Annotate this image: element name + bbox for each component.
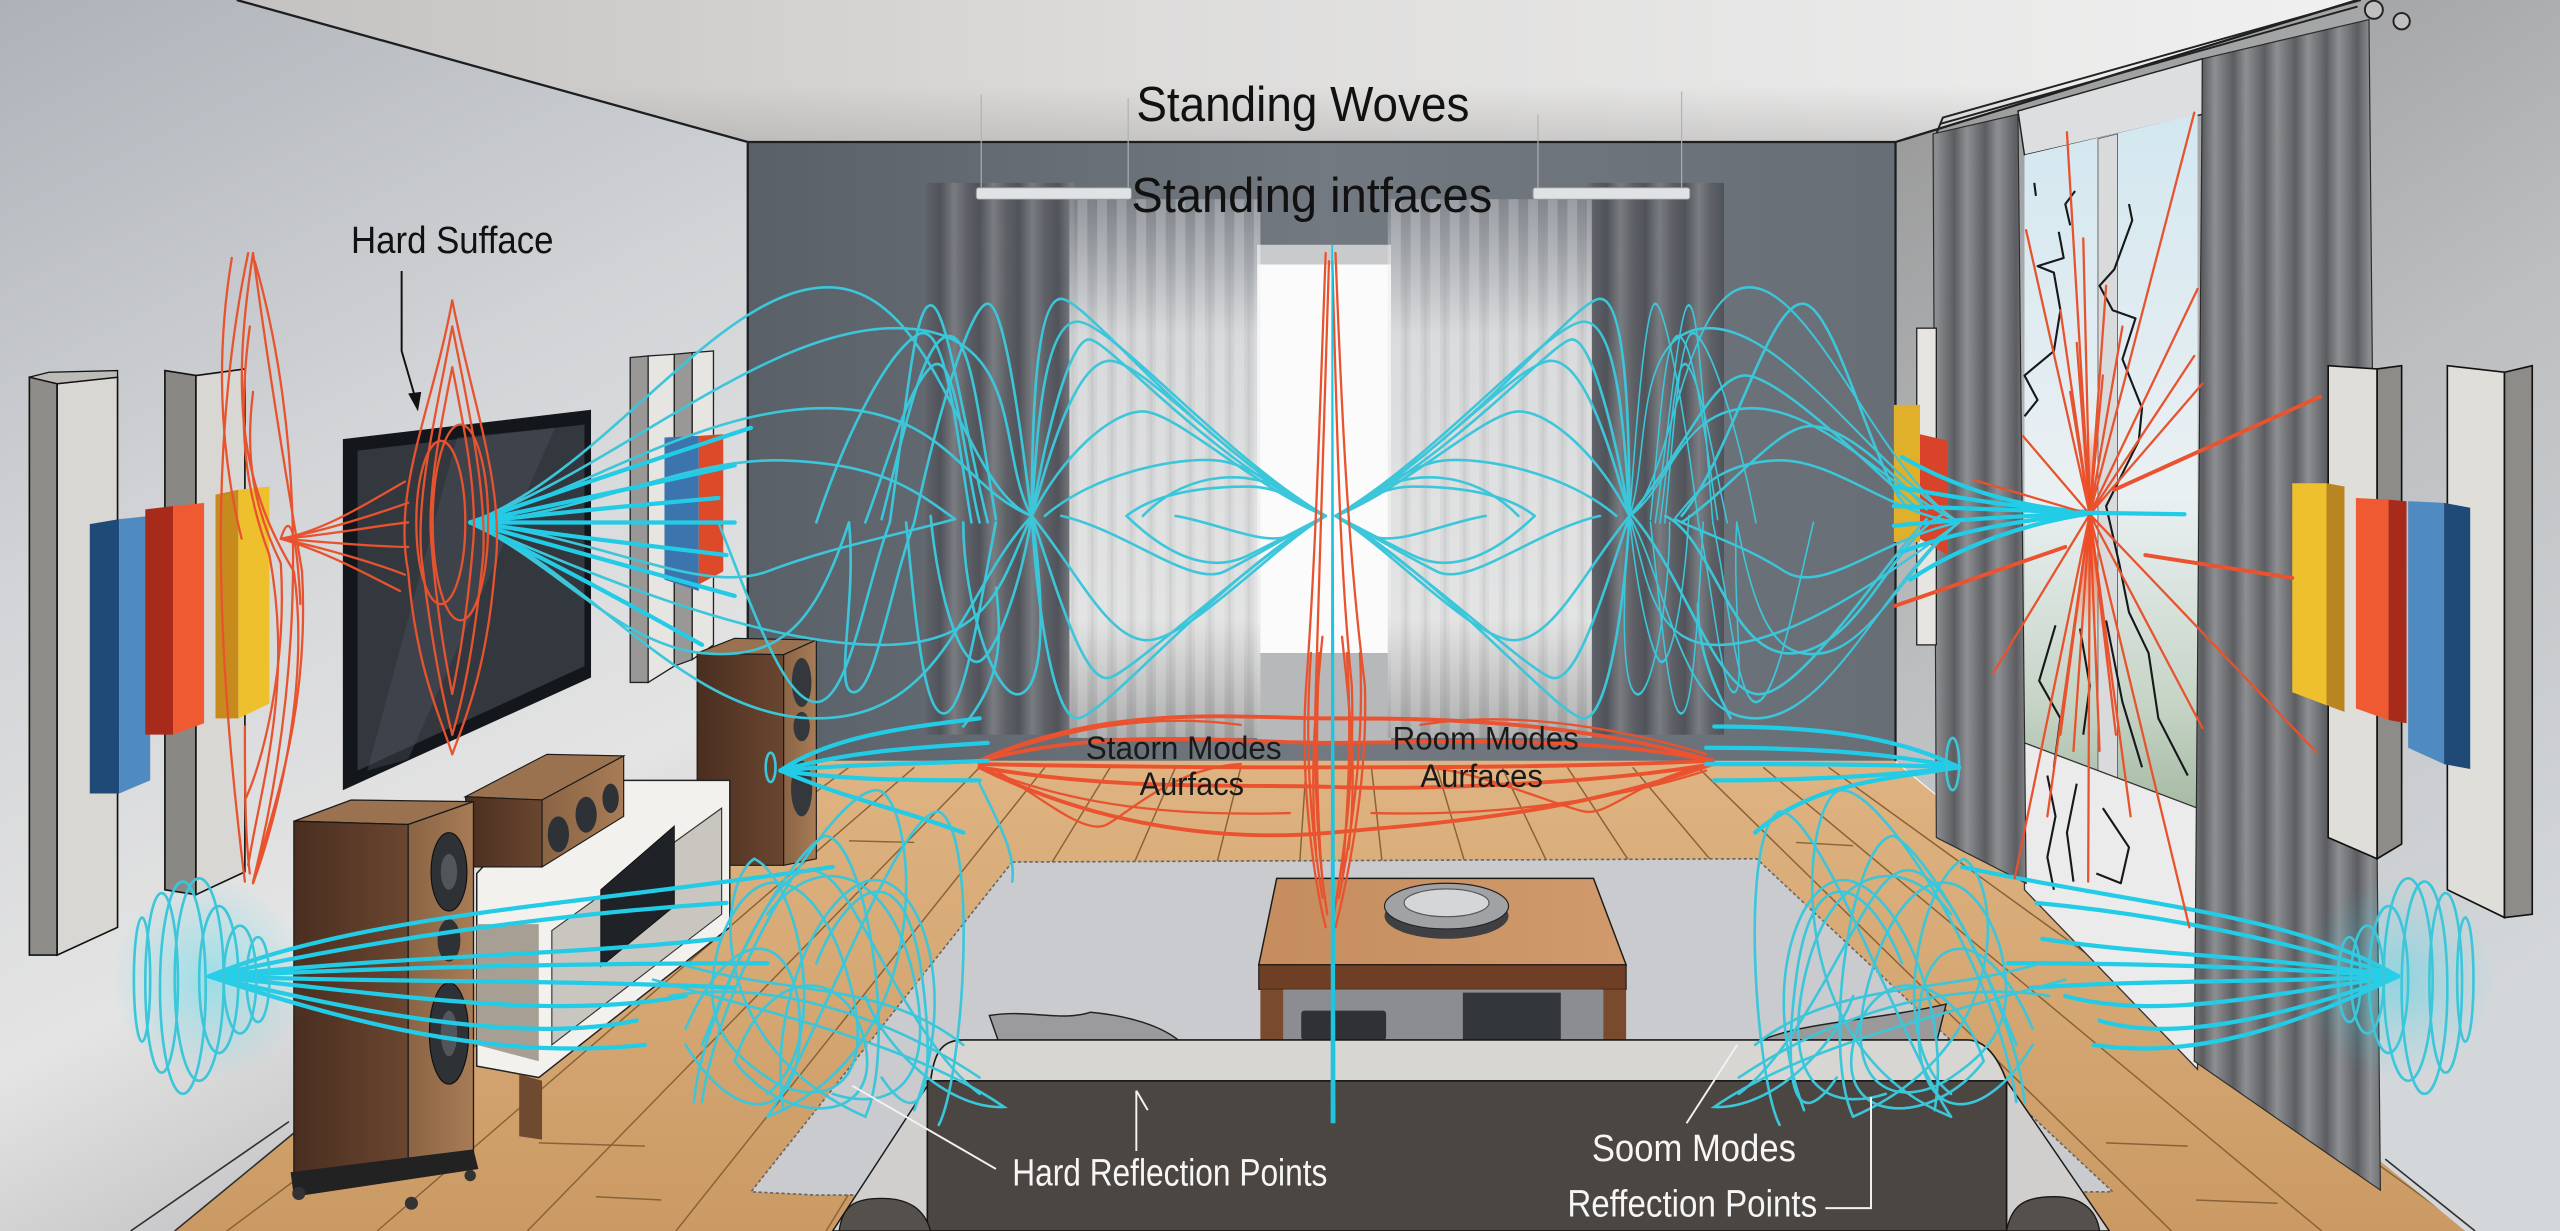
sofa top cushion — [931, 1040, 2007, 1081]
cyan fan upper right — [1894, 457, 2096, 580]
rug — [751, 859, 2113, 1195]
window — [1257, 245, 1391, 653]
back right speaker — [697, 638, 816, 865]
upper cyan bowtie left — [1032, 299, 1326, 718]
left wall red wave — [221, 253, 303, 883]
label: room modes reflection points: Reffection Points — [1567, 1182, 1817, 1225]
cyan mid fan left — [766, 588, 1013, 882]
right window with cracked glass — [2018, 59, 2202, 1069]
left wall — [0, 0, 748, 1231]
small right panels — [1894, 328, 1948, 645]
sofa left arm — [833, 1081, 931, 1231]
small color panels — [664, 434, 723, 591]
label: room modes reflection points: Soom Modes — [1592, 1127, 1796, 1170]
right wall — [1896, 0, 2560, 1231]
media console — [477, 780, 730, 1140]
sofa — [833, 1004, 2109, 1231]
label: hard surface: Hard Sufface — [351, 219, 553, 262]
mullion — [2098, 134, 2118, 784]
window frame above glass — [2018, 59, 2202, 155]
blue panel — [90, 516, 150, 793]
yellow panel — [216, 487, 269, 718]
left sheer curtain — [1069, 199, 1260, 738]
left wall acoustic panels — [29, 351, 723, 955]
label: room modes right: Room Modes — [1393, 719, 1579, 756]
back wall — [748, 142, 1896, 767]
lower right cyan fan — [1962, 867, 2398, 1049]
console left interior — [477, 924, 539, 1061]
right wall acoustic panels — [1894, 328, 2532, 918]
cyan fan upper left — [470, 428, 751, 645]
white panel A — [29, 371, 118, 955]
white panel B — [165, 369, 245, 895]
red panel — [145, 503, 204, 735]
label: room modes left — [1086, 729, 1282, 802]
small white panels — [630, 351, 713, 682]
lower left cyan fan — [209, 867, 833, 1049]
left pressure rings — [111, 878, 307, 1094]
coffee table — [1259, 878, 1626, 1040]
hard surface pointer arrow — [402, 271, 421, 411]
cyan right tip line — [2073, 513, 2184, 514]
right dark curtain — [1587, 183, 1724, 735]
side curtains — [1933, 0, 2410, 1190]
upper cyan bowtie right — [1336, 299, 1629, 718]
av receiver — [601, 826, 674, 967]
central vertical cyan line — [1331, 245, 1336, 1123]
sofa body — [927, 1081, 2007, 1231]
extra right cyan lobes — [1629, 304, 1943, 694]
television red wave — [404, 300, 497, 754]
plate stack — [1384, 883, 1509, 939]
left dark curtain — [924, 183, 1074, 735]
ceiling — [237, 0, 2358, 142]
label: room modes reflection points — [1567, 1127, 1817, 1225]
red room mode lens — [980, 716, 1713, 835]
red panel — [2356, 498, 2407, 723]
right pillow — [1755, 1004, 1946, 1043]
upper cyan lobes right — [1624, 287, 1959, 718]
label: hard reflection points: Hard Reflection Points — [1012, 1151, 1327, 1193]
right ceiling light — [1533, 91, 1690, 199]
white panel R1 — [2328, 366, 2402, 859]
cyan mid fan right — [1698, 604, 1959, 833]
sofa arm cushions — [839, 1198, 931, 1231]
label: room modes right: Aurfaces — [1420, 757, 1543, 794]
upper cyan lobes left — [470, 287, 1041, 718]
red fan — [281, 482, 408, 591]
sofa callout lines — [852, 1045, 1871, 1208]
left ceiling light — [976, 95, 1131, 199]
console shelf interior — [552, 808, 722, 1045]
lower left wave tangle — [653, 790, 1004, 1125]
sill and wall under window — [2024, 743, 2198, 1069]
blue panel — [2408, 501, 2470, 769]
left pillow — [989, 1012, 1182, 1043]
cracks — [2024, 183, 2188, 890]
items under table — [1301, 1011, 1386, 1040]
label: room modes right — [1393, 719, 1579, 794]
front left speaker — [291, 800, 478, 1210]
back window and curtains — [924, 91, 1724, 743]
label: room modes left: Staorn Modes — [1086, 729, 1282, 766]
right curtain inner — [1933, 114, 2026, 883]
wood floor — [78, 761, 2475, 1231]
right pressure rings — [2300, 878, 2496, 1094]
curtain rod — [1936, 0, 2410, 134]
lower right wave tangle — [1714, 790, 2065, 1125]
white panel R2 — [2447, 366, 2532, 918]
central vertical red spindle — [1305, 253, 1365, 927]
yellow panel — [2292, 483, 2344, 712]
sofa right arm — [2007, 1081, 2109, 1231]
center speaker — [465, 754, 624, 867]
label: room modes left: Aurfacs — [1140, 765, 1244, 802]
right window red starburst — [1896, 113, 2320, 927]
title line 1: Standing Woves — [1136, 78, 1469, 132]
right curtain outer — [2194, 20, 2380, 1190]
title line 2: Standing intfaces — [1131, 169, 1492, 223]
television — [343, 410, 591, 790]
glass — [2024, 114, 2198, 808]
right sheer curtain — [1388, 199, 1592, 738]
